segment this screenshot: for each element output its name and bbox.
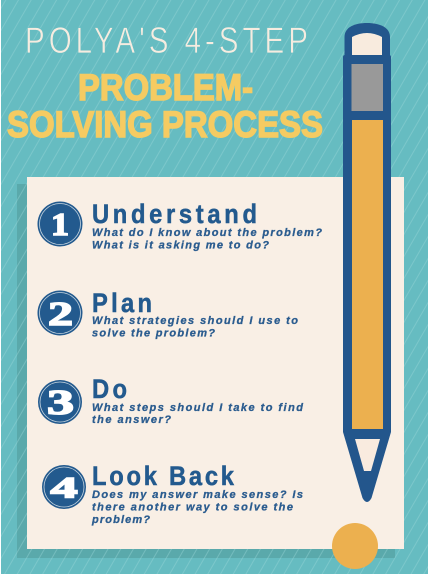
text: step 1 questions: What is it asking me to do? <box>92 240 269 252</box>
heading: problem-solving process: SOLVING PROCESS <box>7 104 323 145</box>
step 1 <box>38 200 322 252</box>
badge 2 <box>38 290 82 336</box>
text: step 4 questions <box>91 489 303 526</box>
badge 4 <box>42 465 86 509</box>
panel: steps card <box>27 177 404 549</box>
heading: Do: Do <box>92 375 127 404</box>
badge 3: 3 <box>47 383 74 422</box>
text: step 1 questions: What do I know about the problem? <box>92 227 322 239</box>
badge 4: 4 <box>50 472 78 504</box>
badge 3 <box>38 380 82 424</box>
pencil metal band <box>352 64 383 111</box>
pencil <box>343 23 391 502</box>
badge 2: 2 <box>48 296 73 333</box>
pencil eraser cap <box>344 23 390 60</box>
step 2 <box>38 289 298 340</box>
text: step 3 questions: the answer? <box>92 414 171 426</box>
pencil wood tip <box>355 439 380 471</box>
text: step 4 questions: Does my answer make sense? Is <box>92 489 303 501</box>
text: step 2 questions: solve the problem? <box>92 328 215 340</box>
text: step 1 questions <box>92 227 322 252</box>
heading: problem-solving process: PROBLEM- <box>78 67 253 108</box>
heading: Understand: Understand <box>92 200 257 229</box>
text: step 4 questions: problem? <box>91 514 150 526</box>
text: step 2 questions <box>92 315 298 340</box>
step 4 <box>42 462 303 526</box>
badge 1 <box>38 202 82 246</box>
pencil body <box>343 55 391 502</box>
decorative orange circle <box>332 523 378 569</box>
text: step 3 questions <box>92 402 303 426</box>
badge 1: 1 <box>51 206 69 242</box>
title: Polya's 4-step: POLYA'S 4-STEP <box>25 21 308 62</box>
text: step 3 questions: What steps should I take to find <box>92 402 303 414</box>
text: step 2 questions: What strategies should I use to <box>92 315 298 327</box>
pencil barrel <box>352 120 383 429</box>
panel shadow <box>17 184 395 558</box>
step 3 <box>38 375 303 426</box>
heading: Look Back: Look Back <box>92 462 235 491</box>
heading: problem-solving process <box>7 67 323 145</box>
heading: Plan: Plan <box>92 289 152 318</box>
text: step 4 questions: there another way to solve the <box>92 502 293 514</box>
